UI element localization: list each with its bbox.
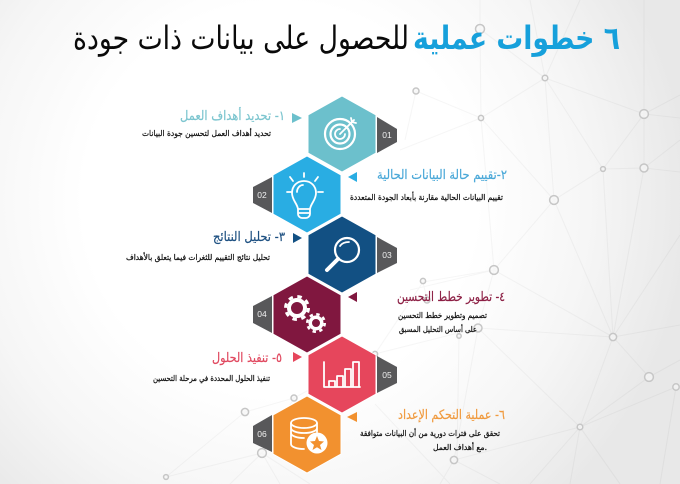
step 6 hexagon: 06 <box>257 429 267 439</box>
title: ٦ خطوات عملية <box>413 19 620 57</box>
text block: step 2: ٢-تقييم حالة البيانات الحالية <box>377 168 507 183</box>
text block: step 4: تصميم وتطوير خطط التحسين <box>398 311 487 320</box>
step 4 hexagon: 04 <box>257 309 267 319</box>
step 5 hexagon <box>308 336 397 413</box>
step 1 hexagon <box>308 96 397 172</box>
step 6 hexagon <box>253 396 341 473</box>
text block: step 3: ٣- تحليل النتائج <box>213 230 285 245</box>
step 2 hexagon <box>253 156 341 233</box>
text block: step 4: ٤- تطوير خطط التحسين <box>397 290 505 305</box>
text block: step 5 <box>153 351 282 383</box>
step 5 hexagon: 05 <box>382 370 392 380</box>
arrow 3 <box>293 233 302 243</box>
text block: step 4 <box>397 290 505 334</box>
text block: step 1: ١- تحديد أهداف العمل <box>180 107 285 124</box>
text block: step 6: ٦- عملية التحكم الإعداد <box>398 408 505 423</box>
text block: step 6: .مع أهداف العمل <box>433 442 487 452</box>
step 3 hexagon <box>308 216 397 293</box>
text block: step 2 <box>350 168 507 202</box>
step 4 hexagon <box>253 276 341 353</box>
text block: step 5: ٥- تنفيذ الحلول <box>212 351 282 366</box>
step 3 hexagon: 03 <box>382 250 392 260</box>
text block: step 3 <box>126 230 285 262</box>
text block: step 1: تحديد أهداف العمل لتحسين جودة البيانات <box>142 128 271 138</box>
arrow 6 <box>347 412 357 422</box>
arrow 5 <box>293 352 302 362</box>
text block: step 3: تحليل نتائج التقييم للثغرات فيما يتعلق بالأهداف <box>126 252 270 262</box>
title: للحصول على بيانات ذات جودة <box>73 19 409 57</box>
arrow 4 <box>348 292 357 302</box>
text block: step 1 <box>142 107 285 138</box>
step 2 hexagon: 02 <box>257 190 267 200</box>
text block: step 5: تنفيذ الحلول المحددة في مرحلة التحسين <box>153 374 270 383</box>
arrow 1 <box>292 113 302 123</box>
step 1 hexagon: 01 <box>382 130 392 140</box>
text block: step 4: على أساس التحليل المسبق <box>399 324 477 334</box>
background network pattern <box>164 0 680 484</box>
arrow 2 <box>348 172 357 182</box>
text block: step 6: تحقق على فترات دورية من أن البيانات متوافقة <box>360 428 500 438</box>
text block: step 2: تقييم البيانات الحالية مقارنة بأبعاد الجودة المتعددة <box>350 191 503 202</box>
text block: step 6 <box>360 408 505 452</box>
